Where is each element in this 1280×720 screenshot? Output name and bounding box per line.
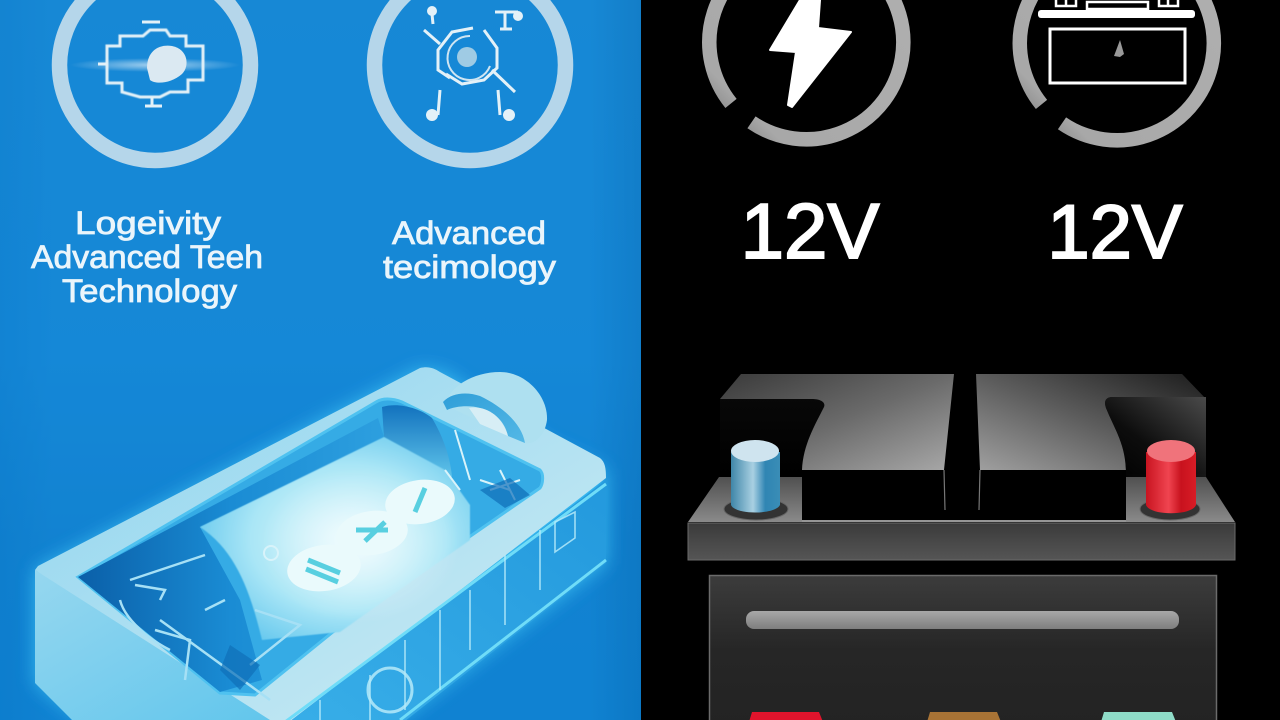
cell indicators: [284, 475, 458, 596]
illustration: translucent battery: [35, 367, 606, 720]
lid front band: [688, 523, 1235, 560]
lid platform top: [688, 477, 1235, 522]
panel: blue technology side: [0, 0, 641, 720]
terminal cap: [443, 372, 547, 443]
icon: lightning ring: [709, 0, 903, 139]
rear right block: [1100, 397, 1206, 477]
text: longevity label: Logeivity: [75, 205, 221, 241]
handle slot: [746, 611, 1179, 629]
indicator tabs: [749, 712, 1176, 720]
front face: [285, 480, 606, 720]
panel: black specification side: [641, 0, 1280, 720]
text: advanced technology label: Advanced: [392, 215, 546, 251]
battery body: [710, 576, 1216, 720]
icon: battery ring: [1020, 0, 1214, 140]
cavity: [78, 399, 543, 695]
text: 12V voltage right: 12V: [1047, 190, 1183, 275]
blue terminal: [724, 440, 788, 520]
left face: [35, 570, 310, 720]
inner cell block: [200, 437, 470, 640]
text: 12V voltage left: 12V: [741, 187, 879, 275]
cover front faces: [802, 470, 1126, 520]
icon: circuit ring: [374, 0, 566, 160]
text: longevity label: Advanced Teeh: [31, 239, 263, 275]
front edge highlights: [285, 484, 606, 720]
rear left block: [720, 374, 830, 477]
front face circuit detail: [320, 512, 575, 720]
text: longevity label: [31, 205, 263, 309]
right cover top: [976, 374, 1206, 470]
text: advanced technology label: tecimology: [383, 249, 556, 285]
text: advanced technology label: [383, 215, 556, 285]
illustration: car battery: [688, 374, 1235, 720]
cavity lower circuit lines: [120, 555, 300, 700]
terminal splash detail: [445, 430, 520, 500]
text: longevity label: Technology: [62, 273, 237, 309]
top face: [35, 367, 606, 720]
red terminal: [1140, 440, 1200, 520]
icon: engine ring: [60, 0, 250, 160]
left cover top: [720, 374, 954, 470]
